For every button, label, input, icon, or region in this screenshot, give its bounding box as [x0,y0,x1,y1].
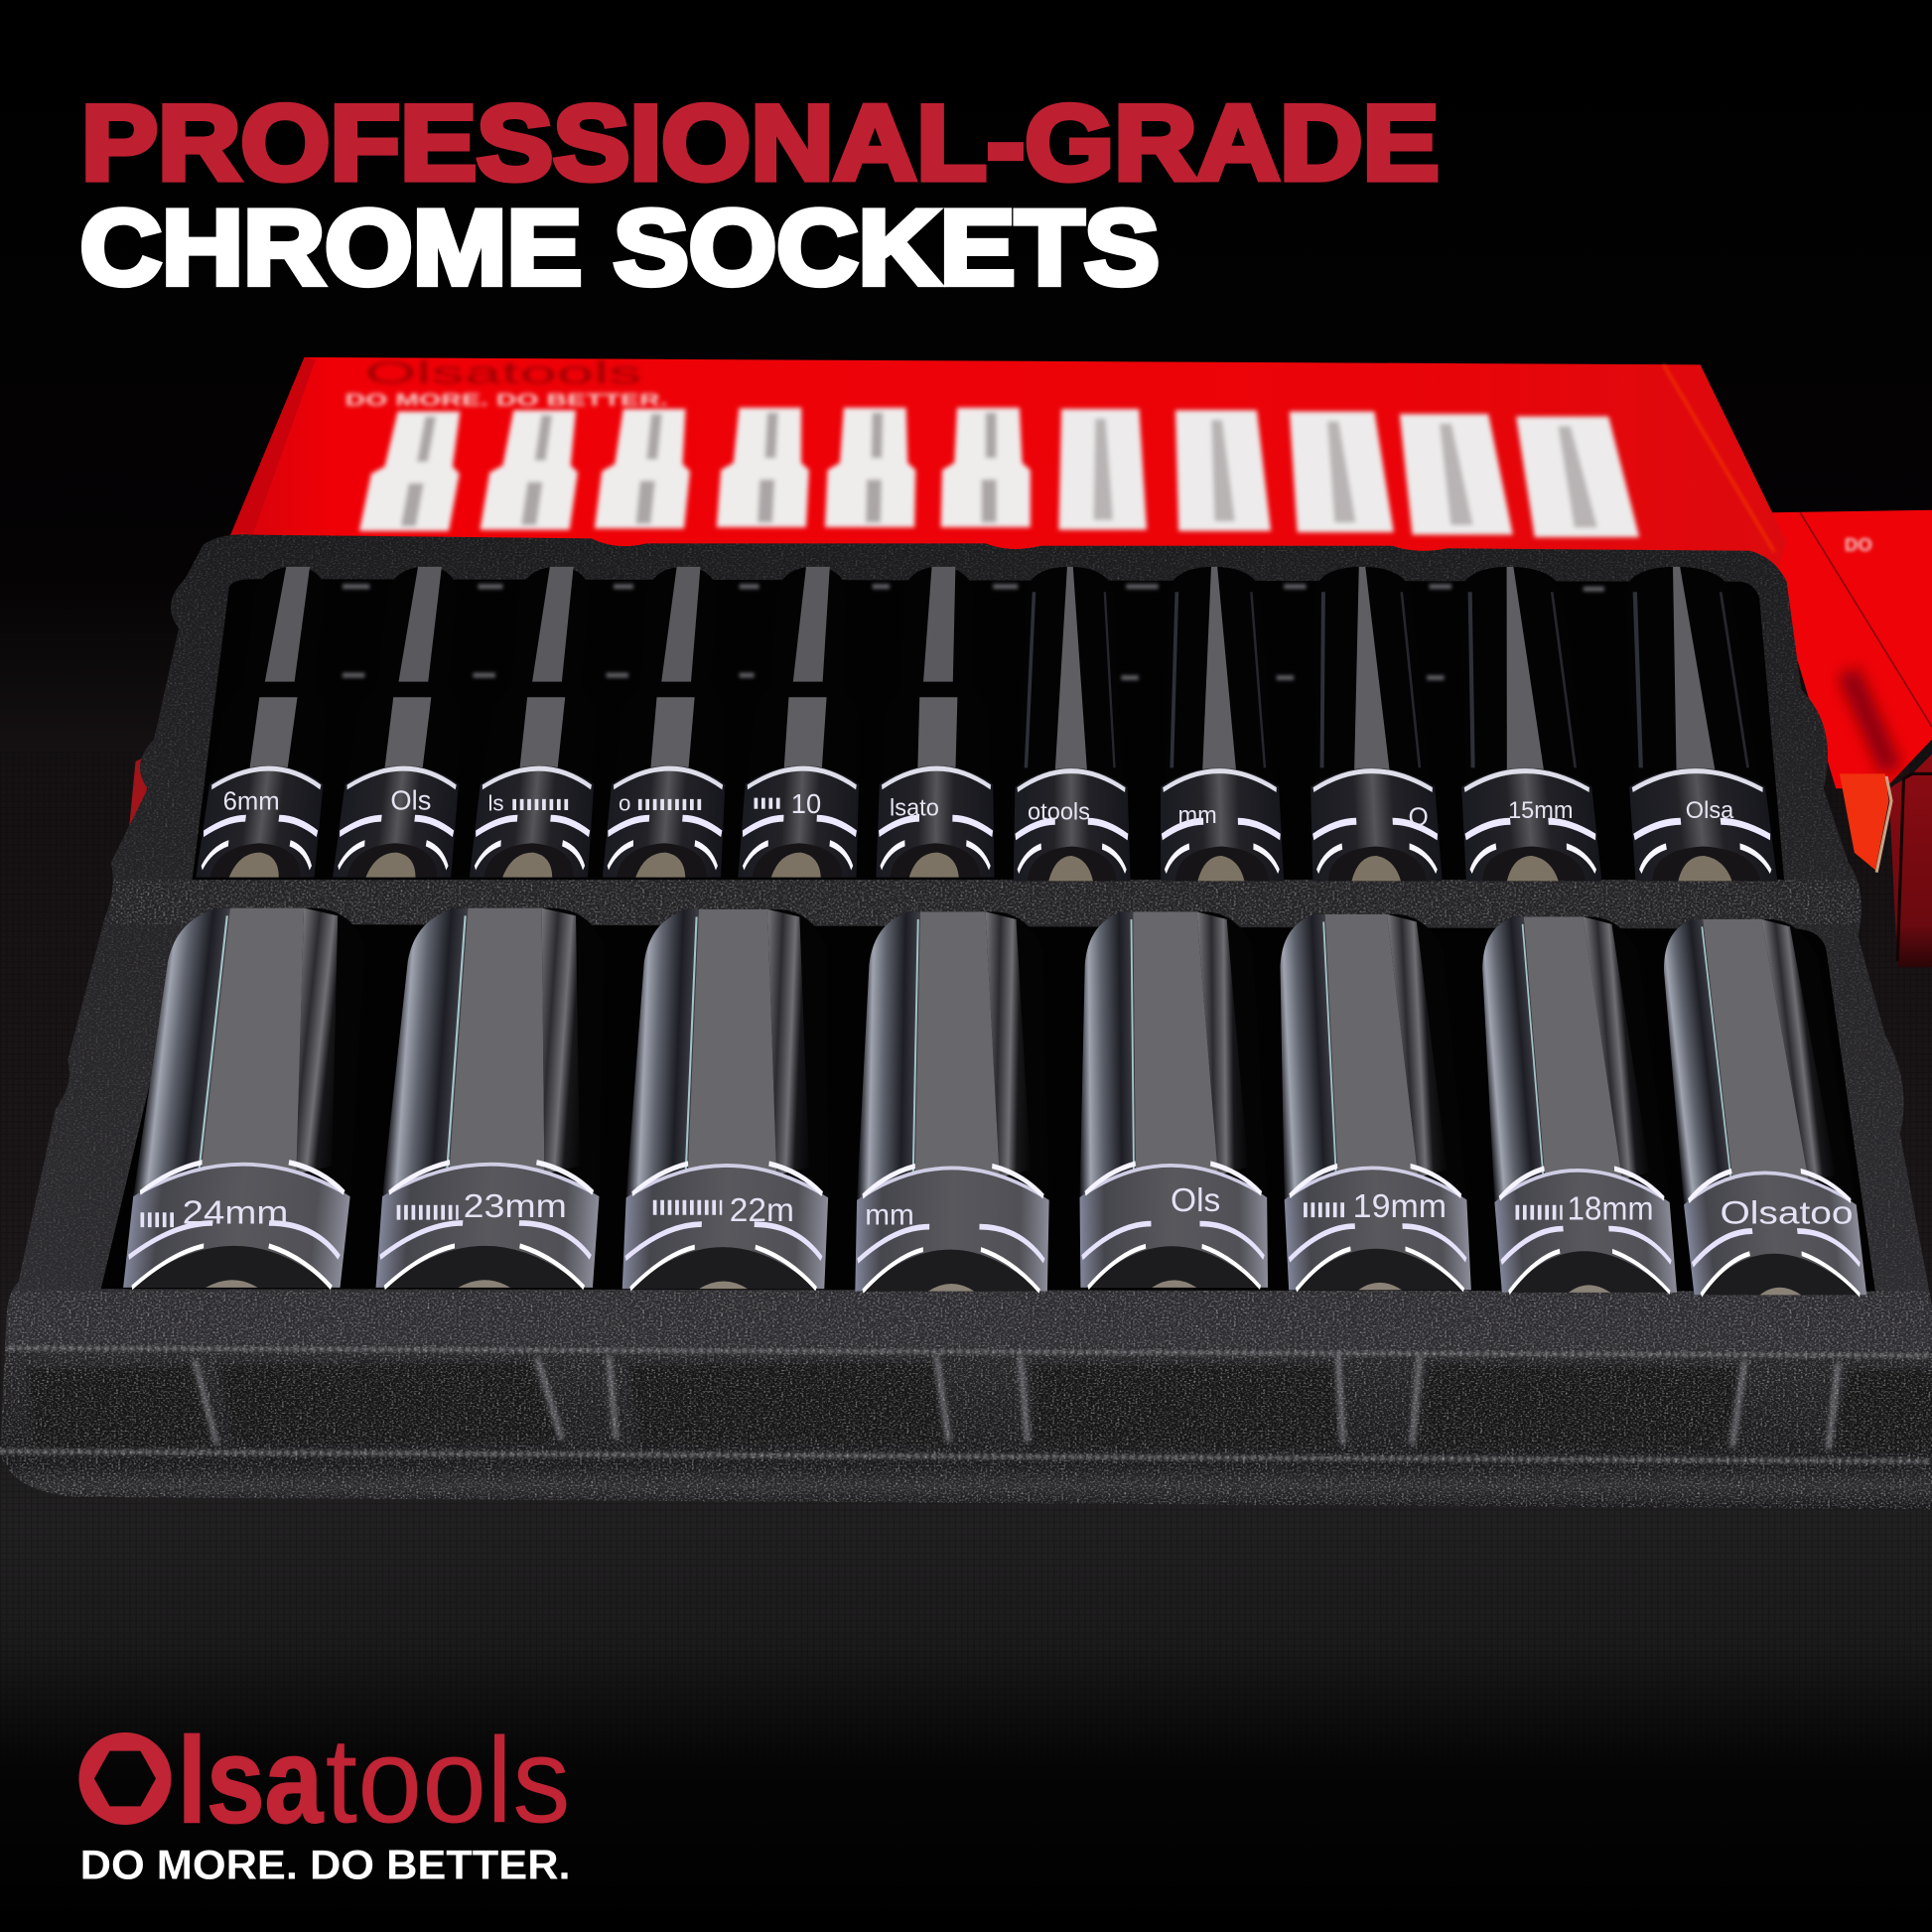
socket 23mm: 23mm [464,1188,567,1225]
socket 13mm: mm [1177,802,1217,828]
box brand text [345,355,668,409]
socket 10mm [738,567,873,878]
socket 11mm: lsato [890,795,939,821]
socket 22mm: 22m [730,1192,794,1229]
orange reflection [1840,773,1889,870]
box brand text: Olsatools [364,355,642,390]
socket 24mm: 24mm [183,1194,288,1231]
socket 15mm: 15mm [1508,797,1574,823]
socket 21mm: mm [865,1199,914,1232]
tray texture, brighter lower rim [0,1292,1932,1513]
socket 12mm [1011,567,1131,881]
upper row of sockets [196,567,1777,881]
socket 8mm [470,567,617,878]
socket 6mm: 6mm [223,785,280,815]
socket 18mm [1471,916,1677,1293]
socket 18mm: 18mm [1568,1191,1654,1228]
tray front face [0,1343,1932,1513]
wordmark light part: tools [326,1714,571,1850]
socket 14mm: O [1409,802,1429,832]
socket 19mm [1271,914,1471,1290]
socket 7mm [333,567,484,878]
socket 19mm: 19mm [1353,1188,1447,1225]
reflections on ledge behind sockets [343,587,1604,678]
second box tagline: DO [1845,534,1872,555]
socket 17mm [1651,919,1866,1295]
tray texture, divider [111,880,1861,924]
title line 2: CHROME SOCKETS [80,188,1160,307]
socket 20mm [1077,911,1268,1288]
title [80,83,1440,307]
socket 15mm [1442,567,1601,881]
socket 21mm [855,911,1054,1292]
lower well [101,924,1875,1292]
socket 7mm: Ols [390,784,431,815]
socket pictures on box [359,408,1639,537]
title line 1: PROFESSIONAL-GRADE [81,83,1440,203]
socket 10mm: 10 [791,788,821,819]
socket 9mm [603,567,743,878]
socket 6mm [196,567,352,878]
red edge at tray left [128,755,150,850]
tray texture [0,530,1932,1516]
brand logo [78,1714,571,1888]
upper well [193,579,1784,880]
socket 17mm: Olsatoo [1721,1194,1854,1230]
socket 13mm [1152,567,1284,881]
socket 20mm: Ols [1171,1182,1220,1219]
socket 22mm [622,909,840,1289]
packaging box, second box at right [128,510,1932,967]
socket 14mm [1297,567,1443,881]
tray top surface [0,530,1932,1350]
wordmark bold part: lsa [178,1714,325,1850]
packaging box, main red lid [221,355,1787,579]
socket 16mm [1604,567,1777,881]
socket 12mm: otools [1028,798,1090,824]
socket 24mm [123,908,382,1288]
lower row of sockets [123,908,1866,1295]
socket 16mm: Olsa [1686,797,1734,823]
socket 8mm: ls [487,791,504,816]
icon: hexagon socket O [78,1732,172,1825]
socket 11mm [876,567,998,878]
tagline: DO MORE. DO BETTER. [80,1842,571,1888]
second box side panel [1889,755,1932,967]
socket 23mm [376,908,620,1288]
socket 9mm: o [619,791,630,816]
plastic socket tray [0,530,1932,1516]
box brand text: DO MORE. DO BETTER. [345,389,668,409]
